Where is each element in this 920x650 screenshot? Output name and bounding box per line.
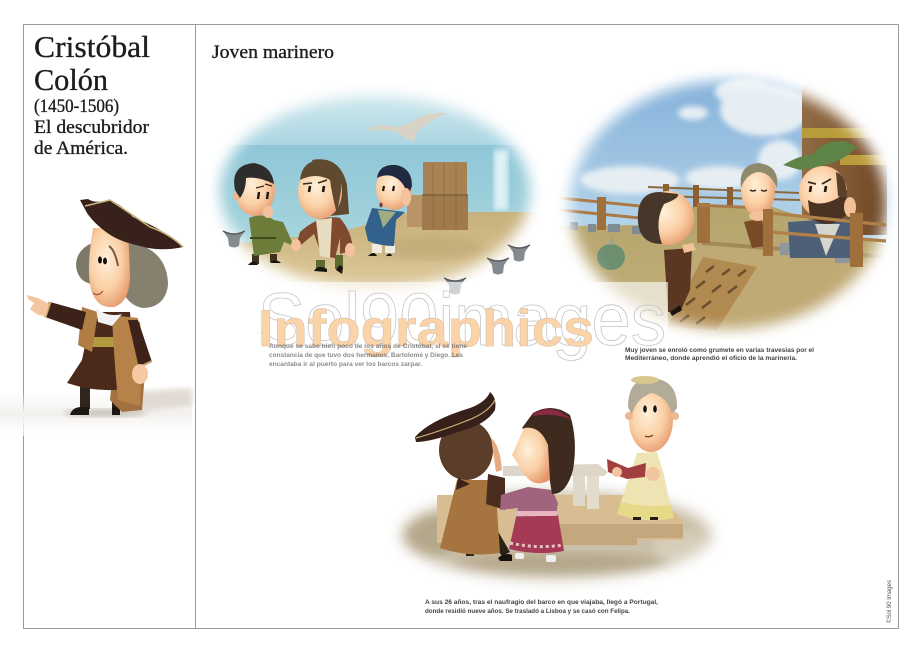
sand quay bbox=[234, 212, 536, 294]
gravel ground bbox=[394, 482, 718, 588]
deck bollards bbox=[780, 243, 850, 263]
caption 2: Mediterráneo, donde aprendió el oficio de la marinería. bbox=[625, 355, 797, 362]
collar bbox=[96, 308, 122, 326]
character: Felipa bbox=[500, 408, 575, 562]
scene 3: Lisbon wedding bbox=[394, 376, 718, 588]
seagull bbox=[370, 113, 447, 142]
title: Cristóbal: Cristóbal bbox=[34, 29, 150, 64]
caption 3: A sus 26 años, tras el naufragio del barco en que viajaba, llegó a Portugal, bbox=[425, 599, 658, 606]
tunic bbox=[67, 312, 134, 390]
watermark: Sol90images outline: Sol90images bbox=[258, 278, 666, 361]
left rail and posts bbox=[560, 198, 640, 218]
section heading: Joven marinero bbox=[212, 43, 334, 63]
character: Columbus with hat bbox=[415, 392, 512, 561]
sky bbox=[229, 90, 521, 145]
sun glint bbox=[494, 150, 508, 210]
caption 2: Muy joven se enroló como grumete en varias travesías por el bbox=[625, 347, 814, 354]
subtitle line 1: El descubridor bbox=[34, 118, 149, 138]
eyes and mouth bbox=[98, 256, 102, 264]
stone platform bbox=[437, 495, 683, 545]
caption 3 bbox=[425, 599, 658, 615]
character: Columbus as a boy bbox=[291, 159, 355, 274]
red book bbox=[607, 459, 646, 479]
legs and shoes bbox=[80, 385, 120, 409]
character: bearded captain bbox=[763, 141, 886, 267]
head bbox=[89, 228, 130, 307]
scene 1: harbour bbox=[211, 90, 539, 294]
character: boy in green bbox=[233, 163, 294, 265]
copyright: ©Sol 90 Images bbox=[886, 580, 893, 623]
dates: (1450-1506) bbox=[34, 97, 119, 117]
bollards bbox=[223, 231, 245, 248]
caption 1 bbox=[269, 343, 467, 368]
title block bbox=[34, 29, 150, 159]
character: Columbus from behind bbox=[638, 191, 696, 316]
caption 1: encantaba ir al puerto para ver los barcos zarpar. bbox=[269, 361, 422, 368]
coat back bbox=[110, 320, 145, 412]
sky with clouds bbox=[562, 71, 894, 245]
vest panels bbox=[78, 307, 98, 352]
watermark: Infographics: Infographics bbox=[258, 300, 594, 358]
front fence bbox=[770, 213, 886, 241]
character: boy in blue bbox=[365, 165, 412, 256]
subtitle line 2: de América. bbox=[34, 139, 128, 159]
gold bands bbox=[802, 128, 871, 138]
character: Columbus pointing bbox=[27, 199, 183, 415]
caption 2 bbox=[625, 347, 814, 362]
watermark: translucent band bbox=[257, 282, 668, 350]
caption 1: constancia de que tuvo dos hermanos, Bartolomé y Diego. Les bbox=[269, 352, 463, 359]
character: grey-haired sailor bbox=[741, 163, 777, 248]
far fence bbox=[648, 187, 800, 200]
green gourd bbox=[597, 244, 625, 270]
crates bbox=[407, 195, 422, 227]
sea bbox=[211, 145, 539, 243]
right arm bbox=[128, 320, 152, 368]
character: priest with book bbox=[607, 376, 679, 520]
gold belt bbox=[92, 337, 115, 347]
pointing arm bbox=[45, 302, 86, 330]
title: Colón: Colón bbox=[34, 62, 108, 97]
mast bbox=[802, 85, 887, 235]
deck bbox=[562, 206, 888, 323]
floor shadow under Columbus bbox=[0, 388, 192, 436]
tricorn hat bbox=[80, 199, 183, 249]
back hair bbox=[122, 240, 168, 308]
bench bbox=[503, 464, 608, 476]
scene 2: on deck bbox=[555, 60, 900, 340]
hatch grating bbox=[667, 257, 757, 330]
caption 1: Aunque se sabe bien poco de los años de Cristóbal, sí se tiene bbox=[269, 343, 467, 350]
caption 3: donde residió nueve años. Se trasladó a Lisboa y se casó con Felipa. bbox=[425, 608, 630, 615]
